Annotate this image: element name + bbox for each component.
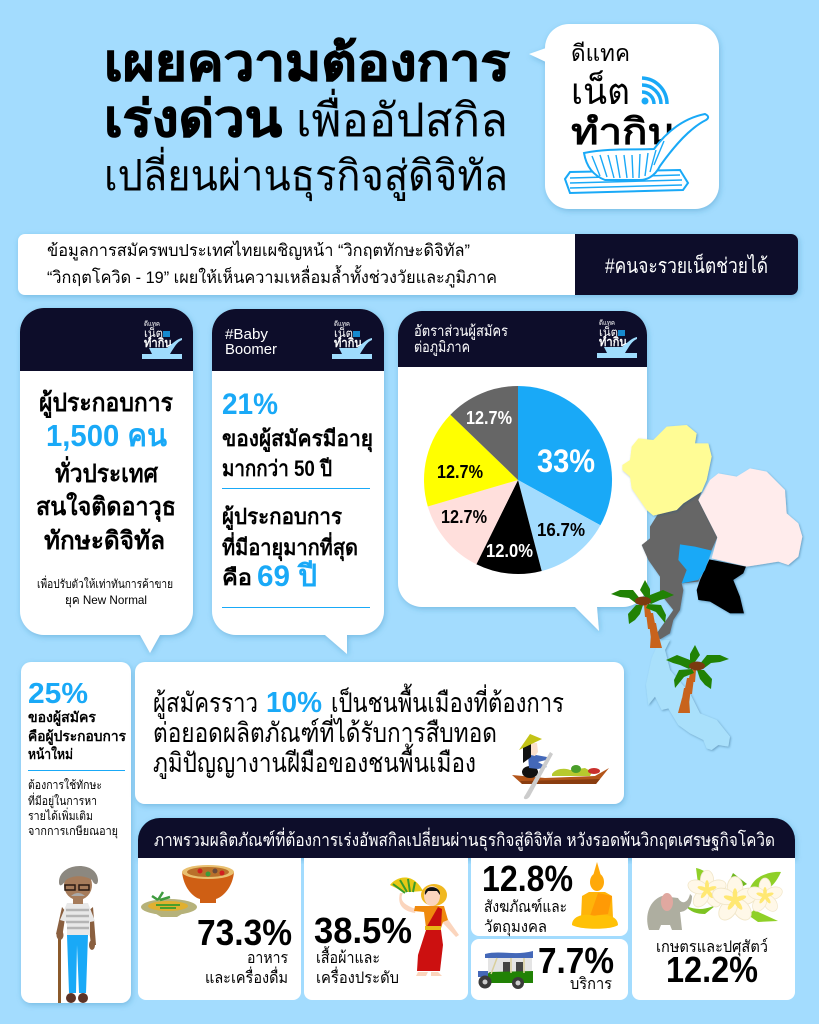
mini logo [332, 320, 372, 359]
title: เร่งด่วน [104, 91, 282, 147]
icon: floating market boat [512, 734, 609, 799]
icon: thai dancer with fan [390, 877, 459, 976]
card: new entrepreneurs: คือผู้ประกอบการ [28, 728, 126, 745]
mini logo: เน็ต [599, 325, 618, 339]
pie chart: 12.7% [441, 507, 487, 527]
icon: elephant and flowers [647, 868, 784, 930]
panel: regional pie chart [398, 311, 647, 631]
icon: tuk tuk [478, 951, 533, 989]
pie chart: 12.0% [486, 541, 533, 561]
card: new entrepreneurs: รายได้เพิ่มเติม [28, 807, 93, 823]
info bar: #คนจะรวยเน็ตช่วยได้ [605, 252, 768, 278]
mini logo: เน็ต [334, 326, 353, 340]
card: new entrepreneurs: ที่มีอยู่ในการหา [28, 792, 97, 809]
card: services: 7.7% [538, 940, 614, 981]
mini logo: เน็ต [144, 326, 163, 340]
card: clothing: 38.5% [314, 910, 412, 951]
pie chart: 12.7% [437, 462, 483, 482]
pie chart: 12.7% [466, 408, 512, 428]
panel: baby boomer: #Baby [225, 326, 268, 343]
card: new entrepreneurs: หน้าใหม่ [28, 745, 73, 762]
card: agriculture: 12.2% [666, 949, 758, 990]
icon: soup bowl and plate [141, 865, 234, 917]
panel: baby boomer: ที่มีอายุมากที่สุด [222, 531, 358, 562]
card: indigenous people: 10% [266, 687, 322, 719]
card: new entrepreneurs [21, 662, 131, 1003]
card: services [471, 939, 628, 1000]
card: clothing: เสื้อผ้าและ [316, 946, 380, 967]
panel: baby boomer: 69 ปี [257, 560, 317, 593]
panel: skills interest: สนใจติดอาวุธ [36, 491, 176, 523]
logo bubble [529, 24, 719, 209]
card: indigenous people: ผู้สมัครราว [153, 688, 258, 719]
logo bubble: ดีแทค [571, 40, 630, 66]
logo bubble: เน็ต [571, 68, 630, 112]
pie chart [424, 386, 612, 574]
info bar: ข้อมูลการสมัครพบประเทศไทยเผชิญหน้า “วิกฤตทักษะดิจิทัล” [47, 240, 470, 261]
panel: baby boomer: คือ [222, 565, 252, 590]
mini logo: ดีแทค [334, 320, 350, 328]
panel: skills interest [20, 308, 193, 653]
panel: skills interest: 1,500 คน [46, 418, 167, 453]
panel: skills interest: เพื่อปรับตัวให้เท่าทันการค้าขาย [37, 575, 173, 591]
panel: baby boomer: Boomer [225, 341, 277, 358]
title: เพื่ออัปสกิล [296, 88, 508, 146]
icon: palm tree north [611, 580, 674, 648]
card: agriculture: เกษตรและปศุสัตว์ [656, 937, 768, 957]
card: religious goods: 12.8% [482, 858, 573, 899]
panel: skills interest: ยุค New Normal [65, 593, 147, 608]
icon: palm tree south [666, 645, 729, 713]
section header [138, 818, 795, 858]
card: new entrepreneurs: 25% [28, 678, 88, 710]
icon: golden buddha [572, 862, 618, 929]
mini logo: ทำกิน [334, 336, 363, 350]
title: เปลี่ยนผ่านธุรกิจสู่ดิจิทัล [104, 147, 508, 202]
card: food [138, 858, 301, 1000]
info bar: “วิกฤตโควิด - 19” เผยให้เห็นความเหลื่อมล้ำทั้งช่วงวัยและภูมิภาค [47, 265, 497, 288]
map of Thailand [622, 425, 802, 750]
section: products overview [138, 818, 795, 1000]
logo bubble: ทำกิน [571, 111, 676, 152]
card: new entrepreneurs: ต้องการใช้ทักษะ [28, 778, 102, 792]
card: food: 73.3% [197, 912, 292, 953]
panel: baby boomer: 21% [222, 388, 278, 421]
panel: skills interest: ทั่วประเทศ [55, 456, 159, 488]
mini logo [597, 319, 637, 358]
title: เผยความต้องการ [104, 35, 510, 91]
panel: skills interest: ผู้ประกอบการ [39, 389, 174, 419]
mini logo: ดีแทค [144, 320, 160, 328]
card: food: และเครื่องดื่ม [205, 966, 288, 987]
card: new entrepreneurs: จากการเกษียณอายุ [28, 824, 118, 839]
panel: baby boomer: มากกว่า 50 ปี [222, 456, 332, 481]
mini logo [142, 320, 182, 359]
mini logo: ดีแทค [599, 319, 615, 327]
card: food: อาหาร [247, 950, 288, 967]
panel: baby boomer: ของผู้สมัครมีอายุ [222, 426, 373, 453]
card: religious goods: สังฆภัณฑ์และ [484, 897, 567, 916]
panel: baby boomer: ผู้ประกอบการ [222, 504, 342, 531]
card: agriculture [632, 858, 795, 1000]
info bar [18, 234, 798, 295]
card: clothing: เครื่องประดับ [316, 966, 399, 987]
card: indigenous people: เป็นชนพื้นเมืองที่ต้องการ [331, 683, 564, 718]
card: new entrepreneurs: ของผู้สมัคร [28, 709, 96, 726]
pie chart: 33% [537, 443, 595, 479]
mini logo: ทำกิน [599, 335, 628, 349]
card: indigenous people: ภูมิปัญญางานฝีมือของชนพื้นเมือง [153, 743, 476, 779]
mini logo: ทำกิน [144, 336, 173, 350]
card: religious goods [471, 858, 628, 937]
card: indigenous people: ต่อยอดผลิตภัณฑ์ที่ได้รับการสืบทอด [153, 714, 497, 748]
pie chart: 16.7% [537, 520, 585, 540]
card: services: บริการ [570, 976, 612, 993]
panel: regional pie chart: ต่อภูมิภาค [414, 339, 470, 356]
panel: baby boomer [212, 309, 384, 654]
card: clothing [304, 858, 468, 1000]
panel: regional pie chart: อัตราส่วนผู้สมัคร [414, 323, 508, 340]
card: indigenous people [135, 662, 624, 804]
icon: elderly man [56, 866, 98, 1003]
title [104, 35, 510, 202]
panel: skills interest: ทักษะดิจิทัล [44, 527, 165, 555]
card: religious goods: วัตถุมงคล [484, 919, 547, 937]
